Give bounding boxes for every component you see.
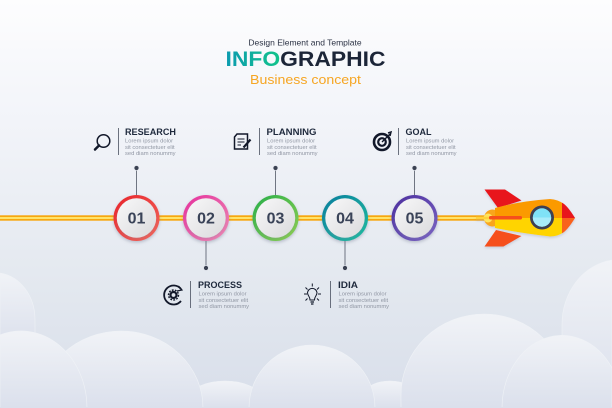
body research — [125, 138, 176, 157]
block planning — [234, 127, 318, 157]
rocket stripe — [489, 216, 522, 220]
body research: sed diam nonummy — [125, 151, 176, 157]
body planning: Lorem ipsum dolor — [267, 138, 315, 144]
connector 05 — [414, 168, 416, 195]
body idia: sit consectetuer elit — [338, 298, 389, 304]
connector 01 — [136, 168, 138, 195]
body idia — [338, 292, 389, 310]
connector 02 — [205, 241, 207, 268]
body planning: sed diam nonummy — [267, 151, 318, 157]
step 02: 02 — [197, 210, 215, 228]
icon: target — [374, 132, 391, 150]
heading research: RESEARCH — [125, 127, 176, 137]
step 03: 03 — [267, 210, 284, 228]
heading idia: IDIA — [338, 280, 359, 290]
icon: document — [234, 134, 250, 149]
step 01: 01 — [128, 210, 146, 228]
icon: light bulb — [304, 284, 321, 304]
step 04 — [322, 195, 368, 270]
step 04: 04 — [336, 210, 354, 228]
connector 03 — [274, 168, 276, 195]
icon: gear cycle — [164, 286, 182, 304]
body idia: sed diam nonummy — [338, 304, 389, 310]
block goal — [374, 127, 457, 157]
connector 04 — [344, 241, 346, 268]
step 03 — [252, 166, 298, 241]
step 01 — [114, 166, 160, 241]
block idia — [304, 280, 389, 310]
step 05: 05 — [406, 210, 424, 228]
tagline: business concept: Business concept — [250, 73, 362, 87]
body process: sed diam nonummy — [198, 304, 249, 310]
rocket — [476, 190, 575, 246]
rocket fin top — [484, 190, 522, 208]
heading planning: PLANNING — [266, 127, 316, 137]
step 05 — [392, 166, 438, 241]
body process — [198, 292, 249, 310]
body goal: Lorem ipsum dolor — [406, 138, 454, 144]
heading process: PROCESS — [198, 280, 242, 290]
body research: Lorem ipsum dolor — [125, 138, 173, 144]
icon: magnifier — [95, 135, 110, 150]
rocket exhaust — [484, 210, 503, 227]
body idia: Lorem ipsum dolor — [338, 292, 387, 298]
step 02 — [183, 195, 229, 270]
body planning: sit consectetuer elit — [267, 145, 317, 151]
body process: Lorem ipsum dolor — [198, 292, 247, 298]
block process — [164, 280, 249, 310]
body research: sit consectetuer elit — [125, 145, 175, 151]
clouds — [0, 260, 612, 408]
subtitle: design element: Design Element and Template — [248, 38, 362, 48]
body goal — [406, 138, 457, 157]
heading goal: GOAL — [406, 127, 432, 137]
body goal: sit consectetuer elit — [406, 145, 456, 151]
rocket fin bottom — [484, 230, 522, 246]
body process: sit consectetuer elit — [198, 298, 249, 304]
body goal: sed diam nonummy — [406, 151, 457, 157]
timeline line — [0, 215, 490, 221]
block research — [95, 127, 176, 157]
title — [226, 38, 386, 87]
heading: infographic: INFOGRAPHIC — [226, 47, 386, 71]
rocket window — [530, 206, 554, 230]
body planning — [267, 138, 318, 157]
rocket body — [495, 199, 575, 218]
